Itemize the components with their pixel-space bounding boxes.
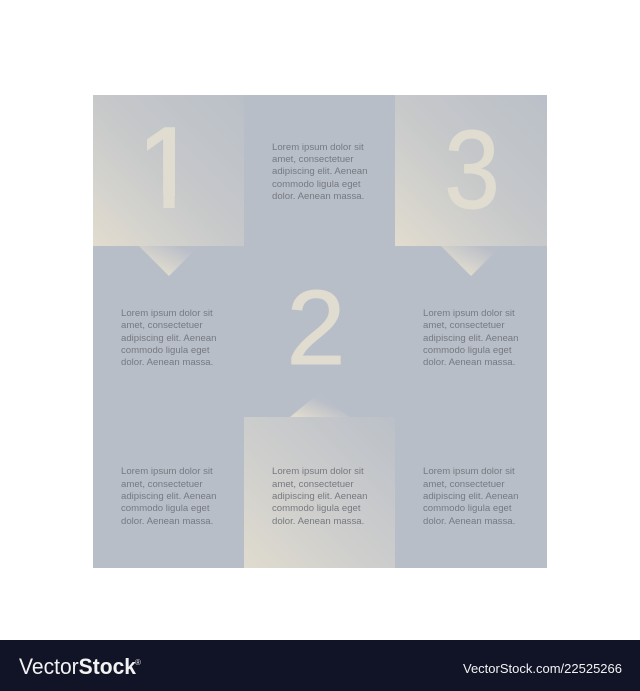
text block: bottom left: amet, consectetuer	[121, 479, 203, 490]
text block: bottom right	[423, 466, 518, 527]
registered mark: ®	[135, 658, 141, 667]
text block: middle left: amet, consectetuer	[121, 320, 203, 331]
number 1: 1	[135, 103, 199, 233]
text block: middle left: adipiscing elit. Aenean	[121, 333, 216, 344]
panel 2: numbered box	[244, 393, 395, 568]
panel 1: numbered box	[93, 95, 244, 276]
number 2: 2	[287, 269, 345, 387]
text block: top center: adipiscing elit. Aenean	[272, 166, 367, 177]
text block: bottom left: dolor. Aenean massa.	[121, 516, 213, 527]
text block: middle right: Lorem ipsum dolor sit	[423, 308, 515, 319]
text block: bottom left: Lorem ipsum dolor sit	[121, 466, 213, 477]
text block: bottom left: commodo ligula eget	[121, 503, 210, 514]
text block: bottom right: Lorem ipsum dolor sit	[423, 466, 515, 477]
main panel background	[93, 95, 547, 568]
watermark logo: VectorStock	[19, 654, 137, 679]
pointer 2	[290, 393, 350, 417]
pointer 3	[441, 246, 501, 276]
text block: bottom right: adipiscing elit. Aenean	[423, 491, 518, 502]
text block: top center: commodo ligula eget	[272, 179, 361, 190]
text block: middle left: commodo ligula eget	[121, 345, 210, 356]
text block: middle left	[121, 308, 216, 368]
number 3: 3	[444, 108, 500, 232]
text block: middle left: Lorem ipsum dolor sit	[121, 308, 213, 319]
pointer 1	[139, 246, 199, 276]
text block: bottom center: Lorem ipsum dolor sit	[272, 466, 364, 477]
text block: top center: dolor. Aenean massa.	[272, 191, 364, 202]
text block: bottom left	[121, 466, 216, 527]
text block: bottom center: adipiscing elit. Aenean	[272, 491, 367, 502]
panel 3: numbered box	[395, 95, 547, 276]
text block: middle left: dolor. Aenean massa.	[121, 357, 213, 368]
text block: bottom right: amet, consectetuer	[423, 479, 505, 490]
text block: bottom right: commodo ligula eget	[423, 503, 512, 514]
watermark bar	[0, 640, 640, 691]
text block: middle right: commodo ligula eget	[423, 345, 512, 356]
text block: bottom center: commodo ligula eget	[272, 503, 361, 514]
watermark url: VectorStock.com/22525266	[463, 662, 622, 676]
text block: bottom center	[272, 466, 367, 527]
text block: middle right	[423, 308, 518, 368]
text block: middle right: adipiscing elit. Aenean	[423, 333, 518, 344]
text block: middle right: dolor. Aenean massa.	[423, 357, 515, 368]
text block: bottom center: dolor. Aenean massa.	[272, 516, 364, 527]
text block: bottom center: amet, consectetuer	[272, 479, 354, 490]
text block: bottom right: dolor. Aenean massa.	[423, 516, 515, 527]
text block: bottom left: adipiscing elit. Aenean	[121, 491, 216, 502]
text block: middle right: amet, consectetuer	[423, 320, 505, 331]
text block: top center: Lorem ipsum dolor sit	[272, 142, 364, 153]
text block: top center	[272, 142, 367, 202]
text block: top center: amet, consectetuer	[272, 154, 354, 165]
